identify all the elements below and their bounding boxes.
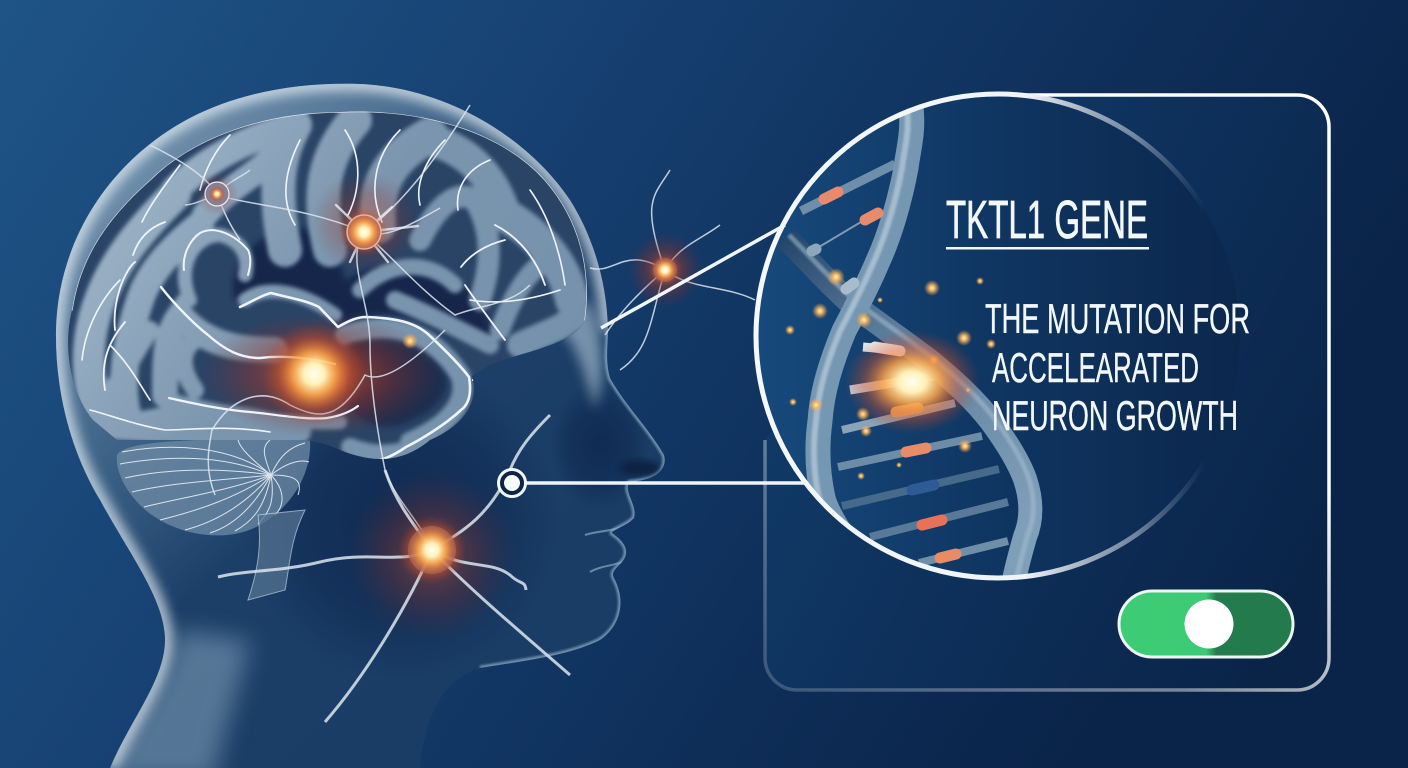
DNA helix bbox=[785, 100, 1033, 580]
dark temporal lobe interior bbox=[345, 341, 446, 426]
head silhouette bbox=[56, 84, 665, 768]
flare bbox=[844, 330, 980, 434]
central dark folds bbox=[233, 228, 492, 345]
heading: TKTL1 GENE: TKTL1 GENE bbox=[946, 190, 1148, 250]
neuron: upper center bbox=[336, 205, 418, 262]
text block: description: ACCELEARATED bbox=[992, 344, 1199, 391]
panel: gene callout card bbox=[765, 95, 1329, 690]
toggle switch bbox=[1119, 591, 1293, 657]
neuron: jaw bbox=[218, 415, 570, 722]
pointer line: upper bbox=[601, 225, 785, 328]
brain stem bbox=[248, 510, 305, 600]
brain bbox=[68, 112, 587, 462]
text block: description bbox=[985, 295, 1250, 439]
base pairs bbox=[812, 192, 956, 558]
neuron: bright core in temporal lobe bbox=[262, 322, 366, 426]
cerebellum bbox=[117, 439, 310, 535]
gyri ribbons bbox=[89, 120, 578, 454]
neural fibres bbox=[150, 105, 755, 550]
neuron: small upper left bbox=[195, 172, 239, 216]
glow in temporal fold bbox=[212, 318, 430, 432]
faint spark in temporal lobe bbox=[402, 333, 418, 349]
neuron: forehead bbox=[627, 232, 703, 308]
pointer line with dot: lower bbox=[498, 470, 806, 496]
text block: description: NEURON GROWTH bbox=[992, 392, 1238, 439]
sparkles bbox=[785, 268, 996, 480]
magnifier lens with DNA bbox=[756, 94, 1240, 580]
text block: description: THE MUTATION FOR bbox=[985, 295, 1250, 342]
